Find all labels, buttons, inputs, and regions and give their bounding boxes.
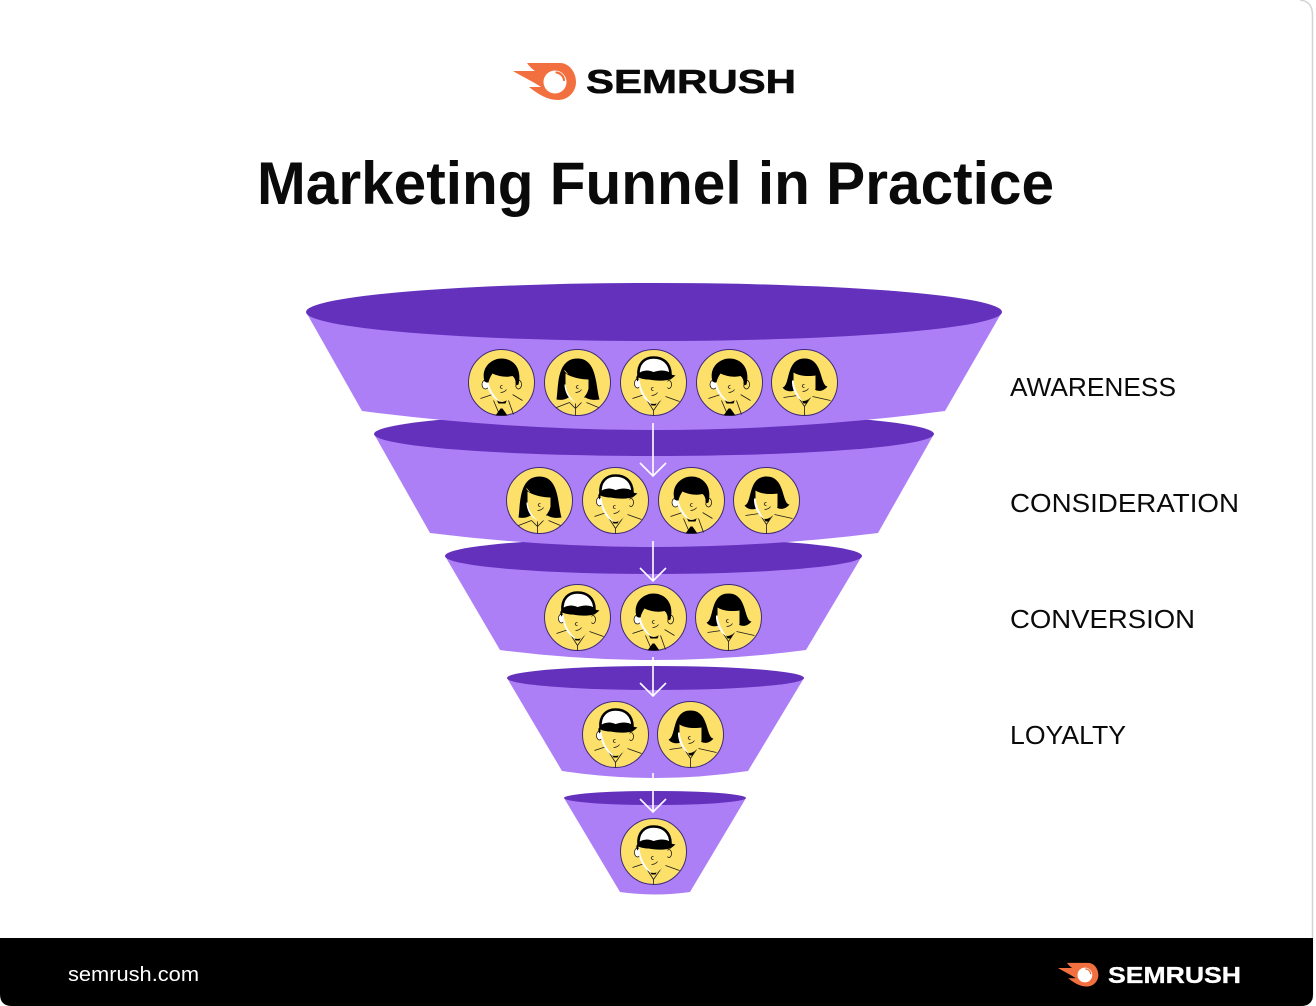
funnel stage 3: conversion (445, 538, 862, 660)
people row 1 (468, 350, 838, 416)
funnel stage 2: consideration (374, 412, 934, 547)
people row 4 (582, 702, 724, 768)
funnel stage 4: loyalty (507, 666, 804, 778)
funnel stage 5: advocacy tip (564, 791, 746, 894)
footer bar (0, 938, 1313, 1006)
label: conversion: CONVERSION (1010, 604, 1195, 634)
arrow: consideration to conversion (640, 541, 666, 581)
funnel stage 1: awareness (306, 283, 1002, 430)
footer url: semrush.com (68, 964, 199, 986)
footer logo: SEMRUSH (1108, 962, 1241, 988)
label: awareness: AWARENESS (1010, 372, 1176, 402)
people row 3 (544, 584, 762, 650)
label: loyalty: LOYALTY (1010, 720, 1126, 750)
title: Marketing Funnel in Practice (257, 150, 1054, 217)
footer logo (1058, 962, 1241, 988)
arrow: conversion to loyalty (640, 657, 666, 696)
logo: Semrush header (513, 63, 796, 101)
arrow: awareness to consideration (640, 423, 666, 476)
people row 2 (506, 468, 800, 534)
label: consideration: CONSIDERATION (1010, 488, 1239, 518)
funnel (306, 283, 1002, 894)
logo: Semrush header: SEMRUSH (586, 64, 796, 101)
people row 5 (620, 818, 686, 884)
arrow: loyalty to final stage (640, 773, 666, 812)
